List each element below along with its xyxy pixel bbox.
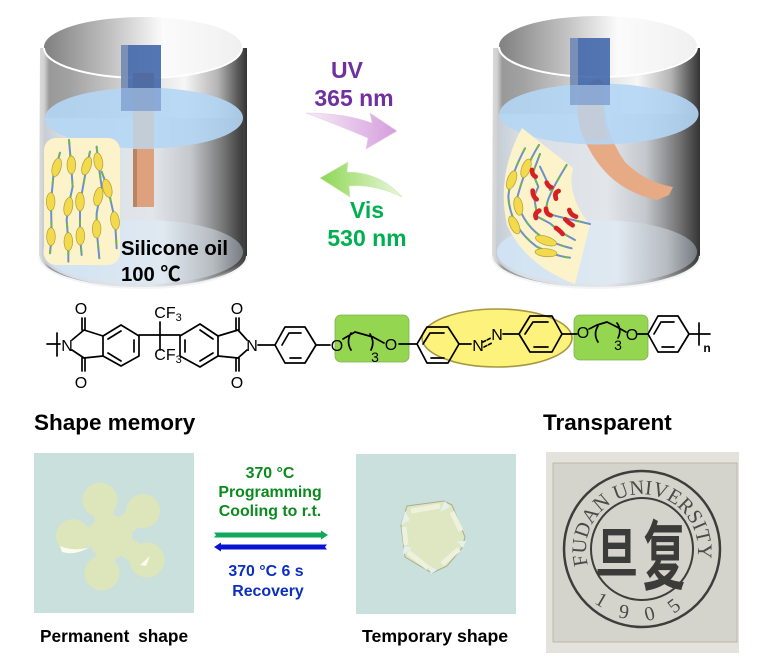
logo seal characters: 复	[643, 495, 685, 606]
arrow: UV forward	[306, 113, 397, 149]
atoms: n	[703, 341, 711, 355]
front lip	[499, 47, 697, 77]
folded film	[401, 501, 465, 573]
atoms: CF	[154, 347, 176, 364]
heading: shape memory: Shape memory	[34, 410, 196, 435]
process labels and arrows: Programming	[218, 484, 322, 501]
chemical structure	[47, 301, 711, 392]
label: programming steps: 370 °C	[246, 465, 295, 482]
sample holder	[570, 38, 610, 85]
photo: Fudan University logo through transparent film	[546, 452, 739, 653]
holder through oil surface	[121, 88, 161, 111]
holder through oil surface	[570, 85, 610, 105]
atoms: 3	[614, 337, 622, 353]
atoms: O	[231, 301, 243, 318]
cylinder bottom	[497, 220, 697, 284]
atoms: N	[472, 338, 484, 355]
atoms: O	[577, 325, 589, 342]
panel: left cylinder in silicone oil	[39, 17, 247, 288]
label: 530 nm: 530 nm	[327, 225, 407, 251]
panel: right cylinder with bent strip	[492, 16, 700, 288]
label: Vis: Vis	[350, 197, 384, 223]
heading: transparent: Transparent	[543, 410, 672, 435]
atoms: O	[75, 375, 87, 392]
oil surface	[500, 84, 698, 144]
logo rings	[564, 471, 720, 627]
atoms: N	[61, 338, 73, 355]
logo seal characters: 旦	[595, 511, 638, 590]
label: permanent shape: Permanent shape	[40, 626, 188, 646]
atoms: N	[246, 338, 258, 355]
logo seal characters	[595, 495, 685, 606]
atoms: O	[231, 375, 243, 392]
straight orange strip	[133, 73, 154, 207]
highlight: flexible spacer 1	[335, 315, 409, 362]
atoms: O	[385, 337, 397, 354]
bottom lip	[492, 256, 700, 288]
atoms: 3	[371, 349, 379, 365]
logo text: founding year: 1905	[595, 594, 680, 620]
cylinder rim	[499, 16, 697, 76]
oil surface	[45, 88, 243, 148]
label: temporary shape: Temporary shape	[362, 626, 508, 646]
photo: temporary folded shape	[356, 454, 516, 614]
process labels and arrows: Cooling to r.t.	[219, 503, 321, 520]
bonds	[47, 316, 710, 371]
sample holder	[121, 45, 161, 88]
arrow: reverse blue	[214, 542, 327, 552]
fold notches	[401, 501, 466, 574]
strip inside oil surface	[578, 84, 608, 142]
process labels and arrows: Recovery	[232, 583, 304, 600]
bent orange strip	[578, 79, 673, 200]
atoms: O	[331, 338, 343, 355]
label: recovery steps: 370 °C 6 s	[228, 563, 304, 580]
atoms	[61, 301, 711, 392]
atoms: O	[626, 327, 638, 344]
highlight: flexible spacer 2	[574, 315, 648, 360]
atoms: CF	[154, 305, 176, 322]
lower oil volume	[42, 118, 243, 287]
label: 365 nm: 365 nm	[314, 85, 394, 111]
cylinder bottom	[43, 220, 243, 284]
highlight: azobenzene	[422, 309, 572, 367]
logo text: university name: FUDAN UNIVERSITY	[572, 480, 712, 567]
process labels and arrows	[214, 465, 328, 600]
atoms: 3	[176, 312, 182, 324]
atoms: 3	[176, 354, 182, 366]
front lip	[44, 48, 242, 78]
cylinder body	[39, 48, 247, 288]
inset: bent polymer chains with azobenzene	[504, 128, 590, 284]
atoms: O	[75, 301, 87, 318]
flower film	[56, 482, 164, 590]
label: 100 degrees: 100 ℃	[121, 264, 181, 286]
photo: permanent flower shape	[34, 453, 194, 613]
strip inside oil surface	[133, 88, 154, 149]
arrow: visible light back	[320, 162, 402, 197]
arrow: forward green	[214, 530, 328, 540]
label: UV: UV	[331, 57, 364, 83]
inset: aligned polymer chains	[44, 138, 121, 265]
cylinder body	[492, 48, 700, 288]
label: silicone oil: Silicone oil	[121, 238, 228, 260]
atoms: N	[491, 327, 503, 344]
lower oil volume	[496, 114, 698, 287]
bottom lip	[39, 256, 247, 288]
cylinder rim	[44, 17, 242, 77]
